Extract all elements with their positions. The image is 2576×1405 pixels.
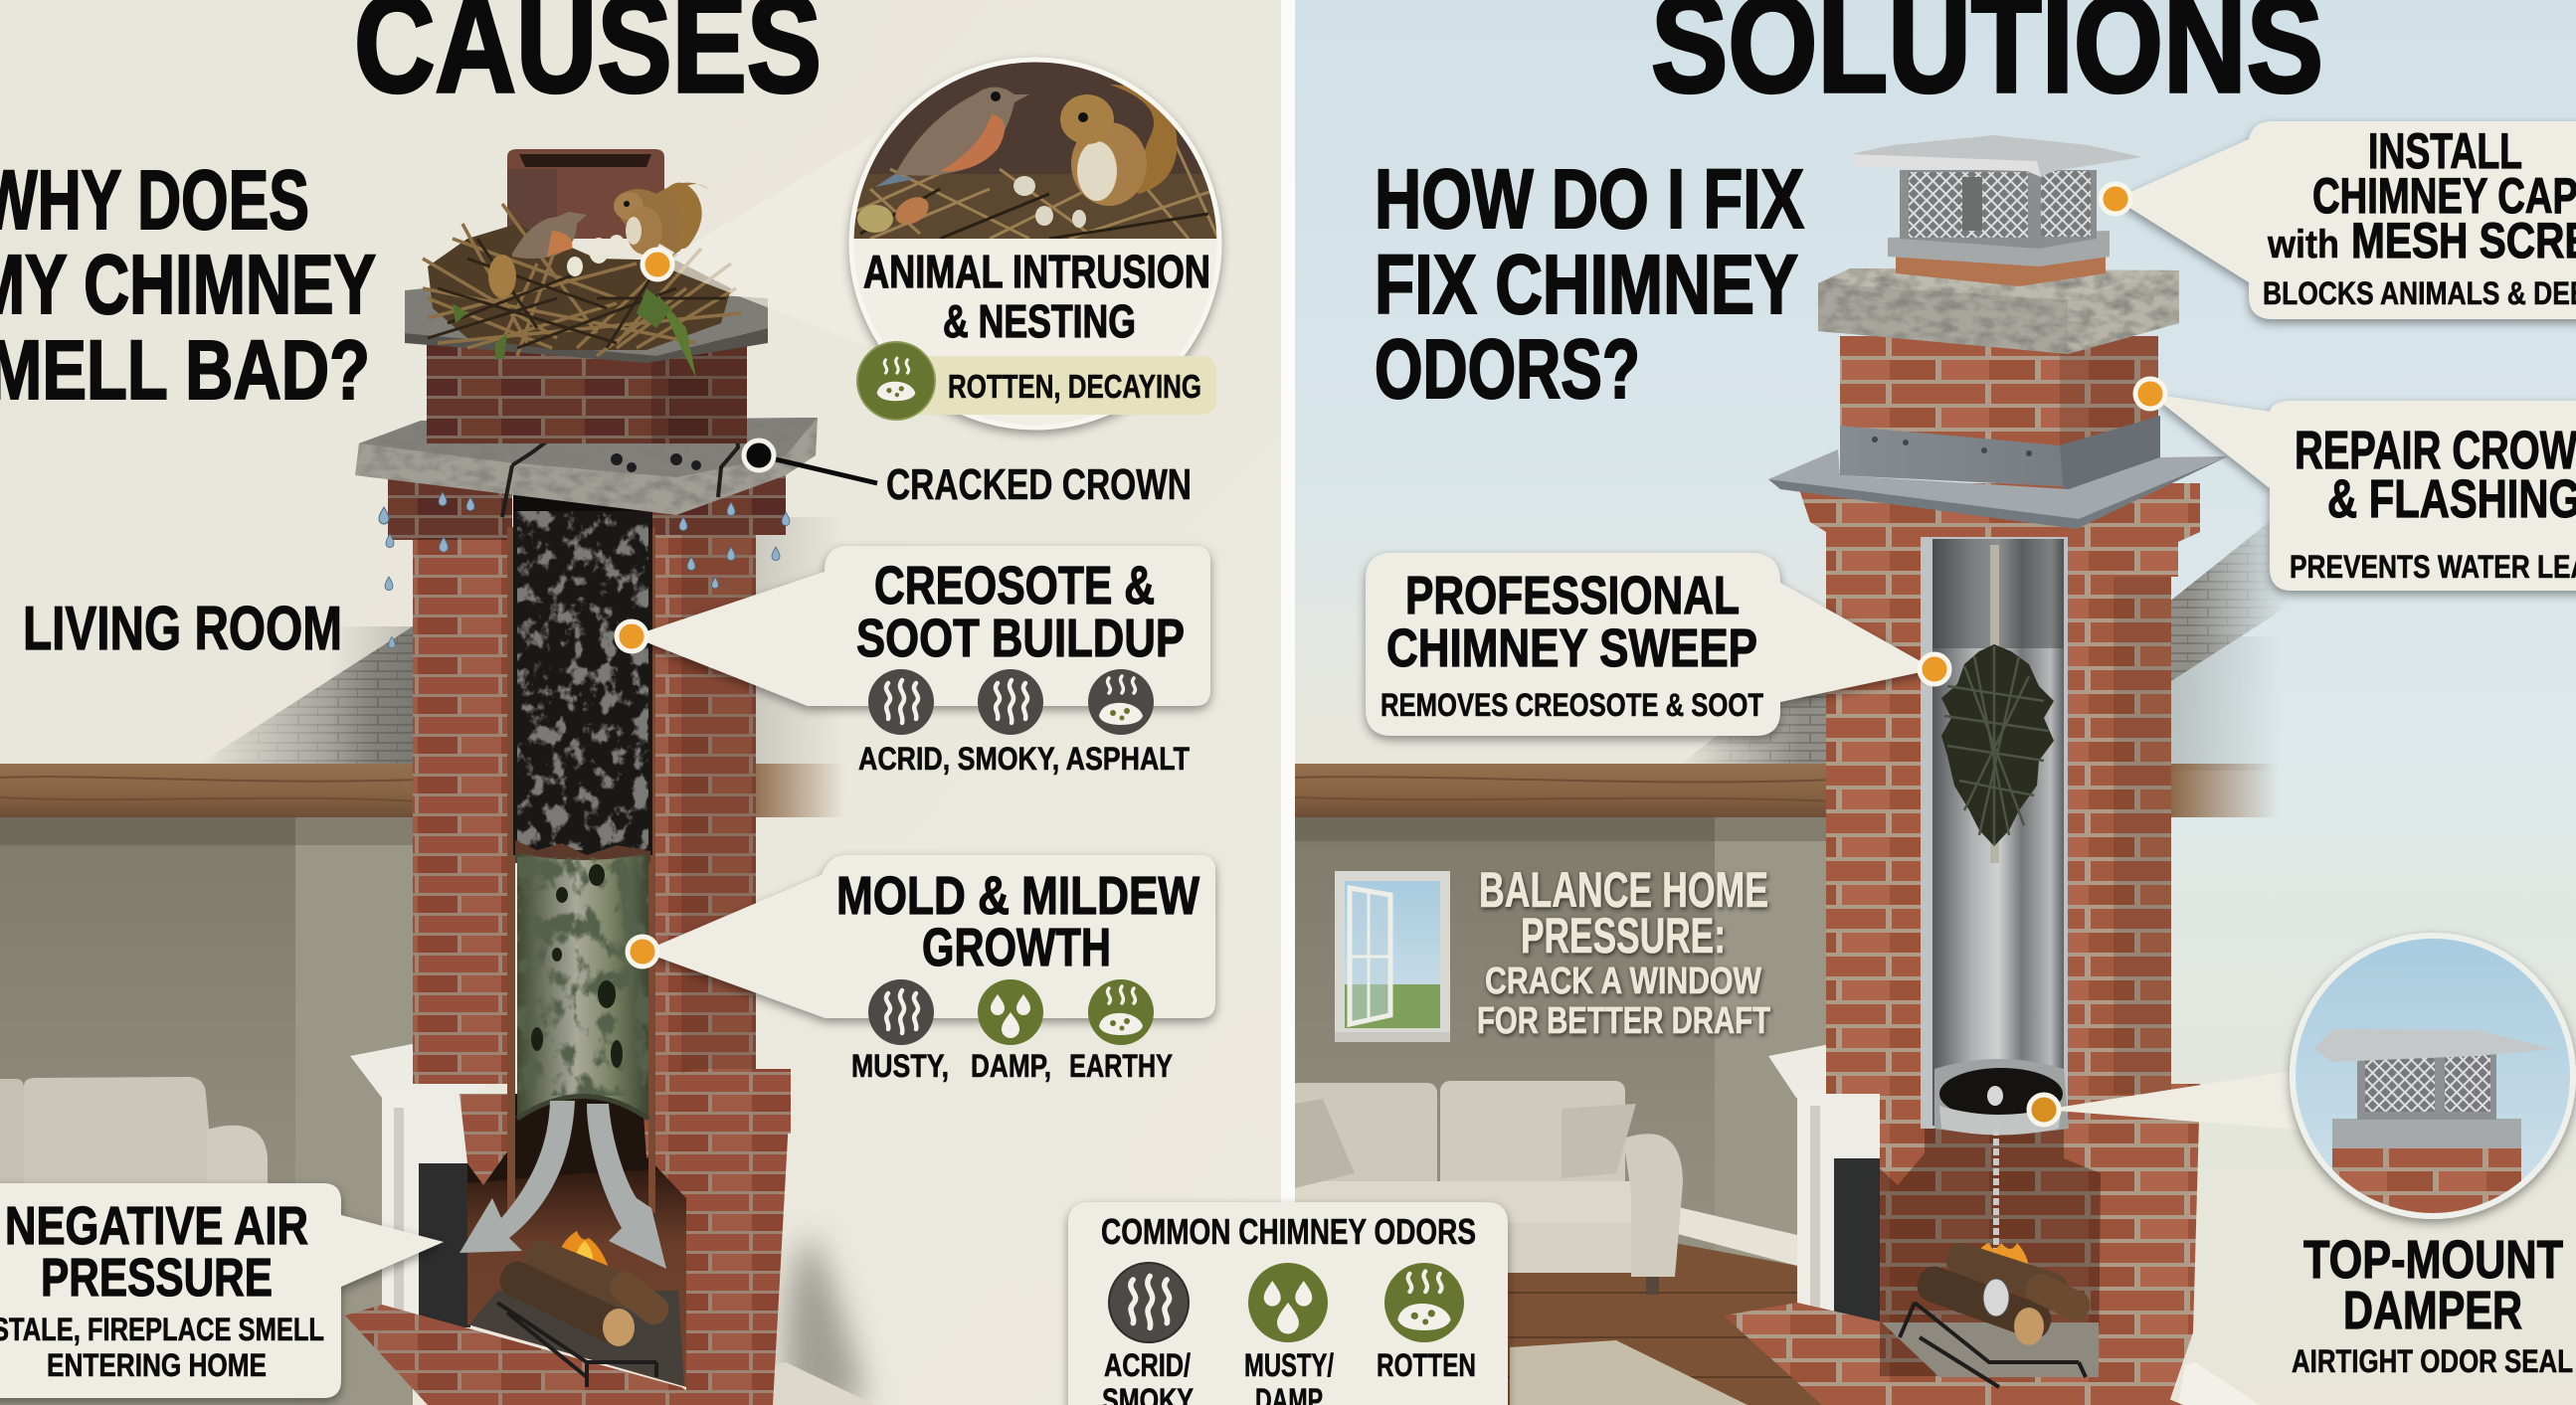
ceiling beam right bbox=[1295, 764, 2278, 817]
throat damper bbox=[1934, 1059, 2069, 1136]
roof shingles right bbox=[1681, 507, 2288, 764]
creosote-lined flue bbox=[513, 487, 652, 863]
chimney cap with mesh bbox=[1851, 135, 2142, 286]
callout: top-mount damper pointer bbox=[2044, 1070, 2298, 1130]
callout: common chimney odors: COMMON CHIMNEY ODORS bbox=[1101, 1211, 1476, 1252]
concrete crown right bbox=[1816, 266, 2182, 356]
callout: cracked crown bbox=[744, 440, 1192, 509]
clay flue bbox=[507, 149, 664, 239]
stainless liner bbox=[1921, 537, 2068, 1129]
heading: how do i fix chimney odors: ODORS? bbox=[1375, 322, 1640, 416]
callout: animal intrusion pointer bbox=[657, 130, 882, 349]
heading: how do i fix chimney odors: FIX CHIMNEY bbox=[1375, 238, 1798, 331]
callout: creosote and soot buildup: ACRID, SMOKY, ASPHALT bbox=[858, 741, 1190, 777]
marker: animal intrusion bbox=[643, 250, 672, 279]
text: balance home pressure: CRACK A WINDOW bbox=[1485, 961, 1761, 1002]
sofa left bbox=[0, 1077, 268, 1193]
marker: creosote bbox=[617, 621, 646, 651]
callout: install chimney cap: INSTALL bbox=[2368, 123, 2522, 179]
callout: common chimney odors: ROTTEN bbox=[1377, 1347, 1476, 1383]
marker: damper bbox=[2029, 1095, 2059, 1125]
callout: professional chimney sweep: PROFESSIONAL bbox=[1405, 566, 1740, 625]
badge: rotten, decaying: ROTTEN, DECAYING bbox=[948, 368, 1201, 405]
callout: mold and mildew growth: MUSTY, bbox=[851, 1048, 949, 1084]
callout: professional chimney sweep: REMOVES CREOSOTE & SOOT bbox=[1380, 687, 1763, 723]
chimney brick columns left bbox=[388, 475, 791, 1213]
callout: common chimney odors: MUSTY/ bbox=[1244, 1347, 1334, 1383]
heading: how do i fix chimney odors: HOW DO I FIX bbox=[1375, 152, 1804, 246]
text: balance home pressure: FOR BETTER DRAFT bbox=[1477, 1000, 1770, 1042]
panel: causes background bbox=[0, 0, 1281, 1405]
chimney sweep brush bbox=[1941, 545, 2054, 863]
fireplace left bbox=[345, 1044, 791, 1405]
chimney brick columns right bbox=[1797, 483, 2200, 1094]
cracked crown bbox=[353, 416, 821, 517]
nest with bird and squirrel bbox=[423, 183, 741, 378]
callout: mold and mildew growth: EARTHY bbox=[1069, 1048, 1173, 1084]
callout: creosote and soot buildup: SOOT BUILDUP bbox=[856, 609, 1185, 668]
ceiling beam left bbox=[0, 764, 845, 817]
callout: common chimney odors: ACRID/ bbox=[1104, 1347, 1191, 1383]
text: balance home pressure bbox=[1477, 862, 1770, 1042]
heading: how do i fix chimney odors bbox=[1375, 152, 1804, 416]
flashing bbox=[1768, 336, 2228, 529]
label: top-mount damper: DAMPER bbox=[2343, 1281, 2522, 1340]
callout: repair crown and flashing bbox=[2150, 394, 2576, 591]
badge: rotten, decaying bbox=[857, 342, 1216, 420]
text: balance home pressure: PRESSURE: bbox=[1521, 908, 1726, 964]
fireplace right bbox=[1724, 1044, 2200, 1405]
callout: mold and mildew growth: MOLD & MILDEW bbox=[836, 866, 1199, 926]
callout: professional chimney sweep bbox=[1366, 553, 1934, 736]
callout: mold and mildew growth: GROWTH bbox=[922, 918, 1111, 977]
callout: mold and mildew growth: DAMP, bbox=[971, 1048, 1051, 1084]
callout: common chimney odors bbox=[1068, 1202, 1508, 1405]
callout: mold and mildew growth bbox=[643, 855, 1215, 1084]
marker: repair crown bbox=[2135, 379, 2165, 409]
panel: animal intrusion circle bbox=[840, 50, 1238, 438]
label: living room: LIVING ROOM bbox=[23, 595, 342, 663]
damper chain and handle bbox=[1993, 1129, 1999, 1268]
marker: chimney sweep bbox=[1920, 654, 1949, 684]
fire and logs left bbox=[494, 1231, 674, 1387]
sofa right bbox=[1288, 1081, 1683, 1295]
label: animal intrusion: & NESTING bbox=[943, 295, 1136, 347]
callout: creosote and soot buildup: CREOSOTE & bbox=[874, 556, 1155, 615]
moldy flue section bbox=[517, 853, 648, 1119]
arrows: downdraft bbox=[460, 1101, 666, 1269]
divider between panels bbox=[1281, 0, 1295, 1405]
callout: negative air pressure: PRESSURE bbox=[41, 1248, 273, 1308]
heading: why does my chimney smell bad bbox=[0, 153, 376, 417]
marker: chimney cap bbox=[2101, 184, 2130, 214]
label: animal intrusion bbox=[863, 246, 1210, 347]
text: balance home pressure: BALANCE HOME bbox=[1479, 862, 1768, 918]
callout: negative air pressure: NEGATIVE AIR bbox=[5, 1196, 308, 1256]
fire and logs right bbox=[1900, 1239, 2095, 1387]
panel: top-mount damper circle bbox=[2288, 933, 2576, 1233]
upper stone slab bbox=[405, 281, 768, 363]
callout: negative air pressure bbox=[0, 1183, 444, 1398]
upper brick stack bbox=[427, 338, 747, 443]
callout: negative air pressure: STALE, FIREPLACE SMELL bbox=[0, 1312, 324, 1347]
callout: install chimney cap: with bbox=[2267, 223, 2339, 266]
water drips bbox=[379, 492, 790, 648]
callout: install chimney cap bbox=[2116, 121, 2576, 319]
callout: cracked crown: CRACKED CROWN bbox=[886, 460, 1192, 509]
callout: negative air pressure: ENTERING HOME bbox=[47, 1347, 267, 1383]
roof shingles left bbox=[199, 626, 418, 764]
marker: mold bbox=[628, 937, 657, 966]
label: animal intrusion: ANIMAL INTRUSION bbox=[863, 246, 1210, 297]
callout: creosote and soot buildup bbox=[632, 546, 1210, 777]
callout: professional chimney sweep: CHIMNEY SWEEP bbox=[1386, 618, 1757, 678]
label: top-mount damper bbox=[2292, 1230, 2573, 1379]
window bbox=[1335, 871, 1450, 1042]
panel: solutions background bbox=[1295, 0, 2576, 1405]
